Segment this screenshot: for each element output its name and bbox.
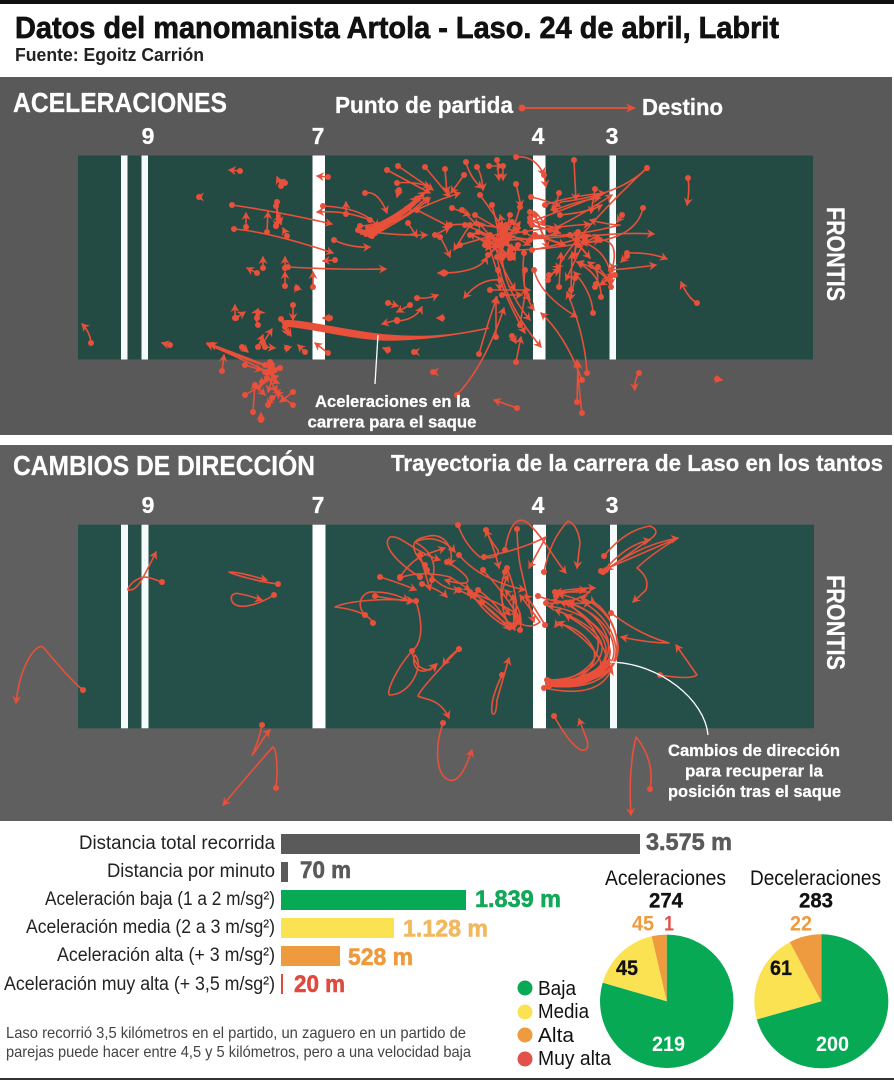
pie chart: aceleraciones: 45 bbox=[616, 957, 638, 980]
row: aceleracion media: Aceleración media (2 a 3 m/sg²) bbox=[26, 917, 275, 938]
legend: punto de partida a destino: Destino bbox=[642, 94, 723, 120]
callout: cambios de direccion bbox=[668, 741, 841, 801]
callout line: saque bbox=[375, 335, 378, 384]
court line numbers: 7 bbox=[312, 123, 324, 149]
pie chart: aceleraciones bbox=[600, 867, 733, 1068]
title: Datos del manomanista Artola - Laso. 24 de abril, Labrit bbox=[15, 10, 779, 45]
thick return stroke bbox=[549, 662, 612, 687]
note text: parejas puede hacer entre 4,5 y 5 kilómetros, pero a una velocidad baja bbox=[6, 1044, 471, 1061]
pie chart: deceleraciones: 200 bbox=[816, 1033, 849, 1056]
pie chart: aceleraciones: Aceleraciones bbox=[605, 867, 726, 890]
court line numbers: 3 bbox=[606, 492, 618, 518]
court line numbers: 7 bbox=[312, 492, 324, 518]
row: aceleracion muy alta bbox=[4, 971, 345, 998]
upper cluster left bbox=[365, 193, 387, 213]
row: aceleracion muy alta: 20 m bbox=[294, 971, 345, 998]
row: distancia total bbox=[79, 829, 732, 856]
row: aceleracion alta bbox=[57, 944, 413, 971]
lower left cluster bbox=[207, 343, 270, 367]
legend: niveles de aceleracion bbox=[518, 978, 612, 1070]
frontis label: FRONTIS bbox=[821, 575, 849, 670]
callout: cambios de direccion: posición tras el saque bbox=[668, 782, 841, 801]
callout: aceleraciones en la carrera: carrera para el saque bbox=[308, 412, 476, 432]
note text bbox=[6, 1025, 471, 1061]
row: distancia por minuto: 70 m bbox=[300, 857, 351, 884]
row: distancia total: Distancia total recorrida bbox=[79, 833, 275, 854]
heading: cambios de direccion: CAMBIOS DE DIRECCIÓN bbox=[13, 450, 315, 481]
row: aceleracion media: 1.128 m bbox=[403, 916, 488, 942]
source line: Fuente: Egoitz Carrión bbox=[15, 45, 204, 65]
pie chart: deceleraciones: 61 bbox=[770, 957, 792, 980]
court: aceleraciones bbox=[78, 156, 813, 360]
callout: aceleraciones en la carrera: Aceleraciones en la bbox=[315, 392, 471, 411]
pie chart: deceleraciones: 283 bbox=[799, 890, 833, 912]
panel: aceleraciones bbox=[0, 77, 892, 435]
callout line: cambios de direccion bbox=[610, 662, 708, 735]
heading: aceleraciones: ACELERACIONES bbox=[13, 87, 227, 118]
row: aceleracion muy alta: Aceleración muy alta (+ 3,5 m/sg²) bbox=[4, 974, 275, 995]
row: aceleracion baja: 1.839 m bbox=[475, 886, 561, 913]
serve thick stroke bbox=[284, 321, 489, 340]
frontis label: FRONTIS bbox=[821, 207, 849, 301]
court line numbers bbox=[142, 123, 618, 149]
row: aceleracion alta: 528 m bbox=[348, 944, 413, 971]
bar chart: distancias y aceleraciones bbox=[4, 829, 732, 998]
note text: Laso recorrió 3,5 kilómetros en el partido, un zaguero en un partido de bbox=[6, 1025, 466, 1042]
subheading: trayectoria: Trayectoria de la carrera de Laso en los tantos bbox=[391, 450, 883, 476]
pie chart: deceleraciones bbox=[750, 867, 888, 1068]
court line numbers: 9 bbox=[142, 123, 154, 149]
row: distancia total: 3.575 m bbox=[646, 829, 732, 856]
legend: niveles de aceleracion: Alta bbox=[538, 1025, 575, 1047]
court line numbers: 4 bbox=[532, 492, 545, 518]
legend: niveles de aceleracion: Media bbox=[538, 1001, 590, 1023]
pie chart: aceleraciones: 274 bbox=[649, 890, 683, 912]
row: aceleracion baja: Aceleración baja (1 a 2 m/sg²) bbox=[45, 889, 275, 910]
centre cluster bbox=[466, 162, 482, 188]
callout: cambios de direccion: para recuperar la bbox=[685, 762, 824, 780]
pie chart: deceleraciones: Deceleraciones bbox=[750, 867, 881, 890]
pie chart: aceleraciones: 1 bbox=[664, 912, 674, 936]
court: cambios de direccion bbox=[78, 525, 814, 728]
row: distancia por minuto: Distancia por minuto bbox=[107, 861, 275, 882]
row: aceleracion media bbox=[26, 916, 488, 942]
legend: niveles de aceleracion: Baja bbox=[538, 978, 577, 1000]
pie chart: aceleraciones: 219 bbox=[652, 1033, 685, 1056]
row: aceleracion baja bbox=[45, 886, 561, 913]
fan near 3 bbox=[548, 600, 614, 683]
panel: cambios de direccion bbox=[0, 445, 892, 821]
court line numbers: 3 bbox=[606, 123, 618, 149]
court line numbers: 9 bbox=[142, 492, 154, 518]
row: distancia por minuto bbox=[107, 857, 351, 884]
row: aceleracion alta: Aceleración alta (+ 3 m/sg²) bbox=[57, 945, 275, 966]
trajectories: accelerations bbox=[82, 157, 722, 420]
pie chart: aceleraciones: 45 bbox=[632, 912, 654, 936]
legend: niveles de aceleracion: Muy alta bbox=[538, 1048, 612, 1070]
callout: cambios de direccion: Cambios de dirección bbox=[668, 741, 840, 760]
trajectories: direction changes bbox=[16, 520, 697, 815]
legend: punto de partida a destino bbox=[335, 92, 723, 120]
legend: punto de partida a destino: Punto de partida bbox=[335, 92, 513, 118]
callout: aceleraciones en la carrera bbox=[308, 392, 476, 432]
court line numbers bbox=[142, 492, 618, 518]
pie chart: deceleraciones: 22 bbox=[790, 912, 812, 936]
court line numbers: 4 bbox=[532, 123, 545, 149]
